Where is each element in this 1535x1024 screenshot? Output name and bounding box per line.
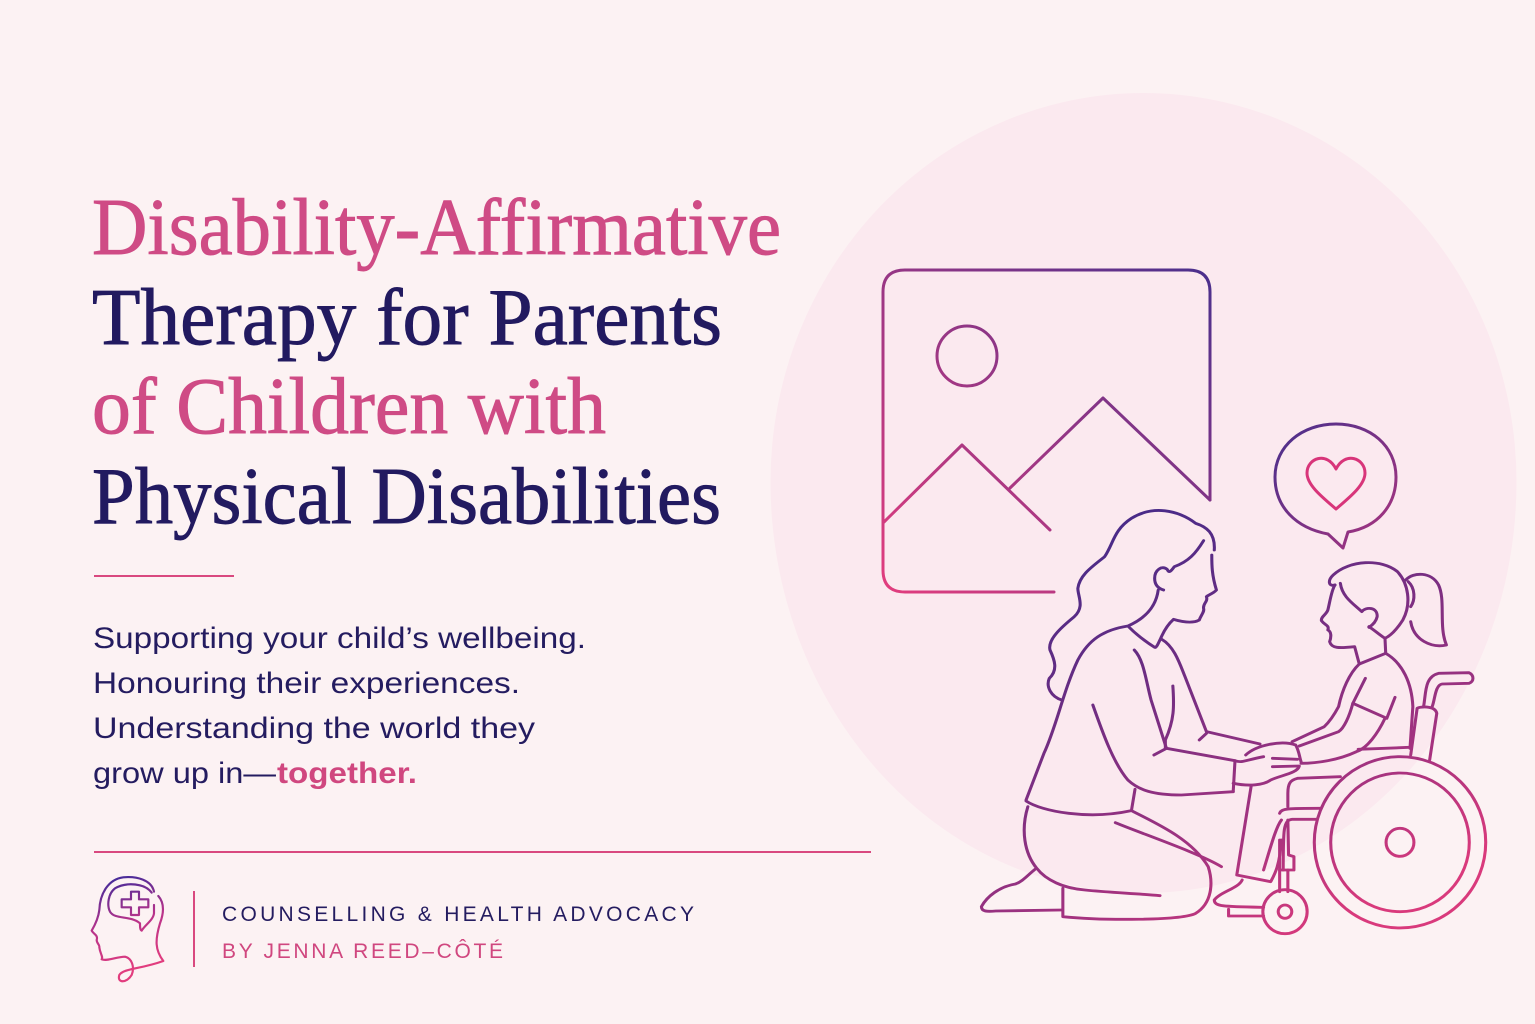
supporting text [93,622,586,790]
icon: logo head with speech bubble and cross [92,877,163,981]
footer text [222,903,694,963]
title: of Children with [92,361,606,451]
icon: speech bubble with heart [1275,424,1396,548]
parent kneeling [981,510,1301,919]
supporting text: together. [277,757,417,790]
short title rule [94,575,234,577]
illustration: parent and child in wheelchair [981,510,1486,934]
title: Therapy for Parents [92,272,722,362]
supporting text: grow up in— [93,757,276,790]
footer text: COUNSELLING & HEALTH ADVOCACY [222,903,694,926]
background circle [770,93,1516,893]
wheelchair [1229,673,1486,934]
logo divider [193,891,195,967]
title: Physical Disabilities [92,451,721,541]
supporting text: Honouring their experiences. [93,667,520,700]
supporting text: Supporting your child’s wellbeing. [93,622,586,655]
child [1214,563,1446,907]
supporting text: Understanding the world they [93,712,535,745]
title: Disability-Affirmative [92,182,781,272]
footer rule [94,851,871,853]
icon: picture frame with sun and mountains [883,270,1210,592]
title [92,182,781,541]
footer text: BY JENNA REED–CÔTÉ [222,940,503,963]
